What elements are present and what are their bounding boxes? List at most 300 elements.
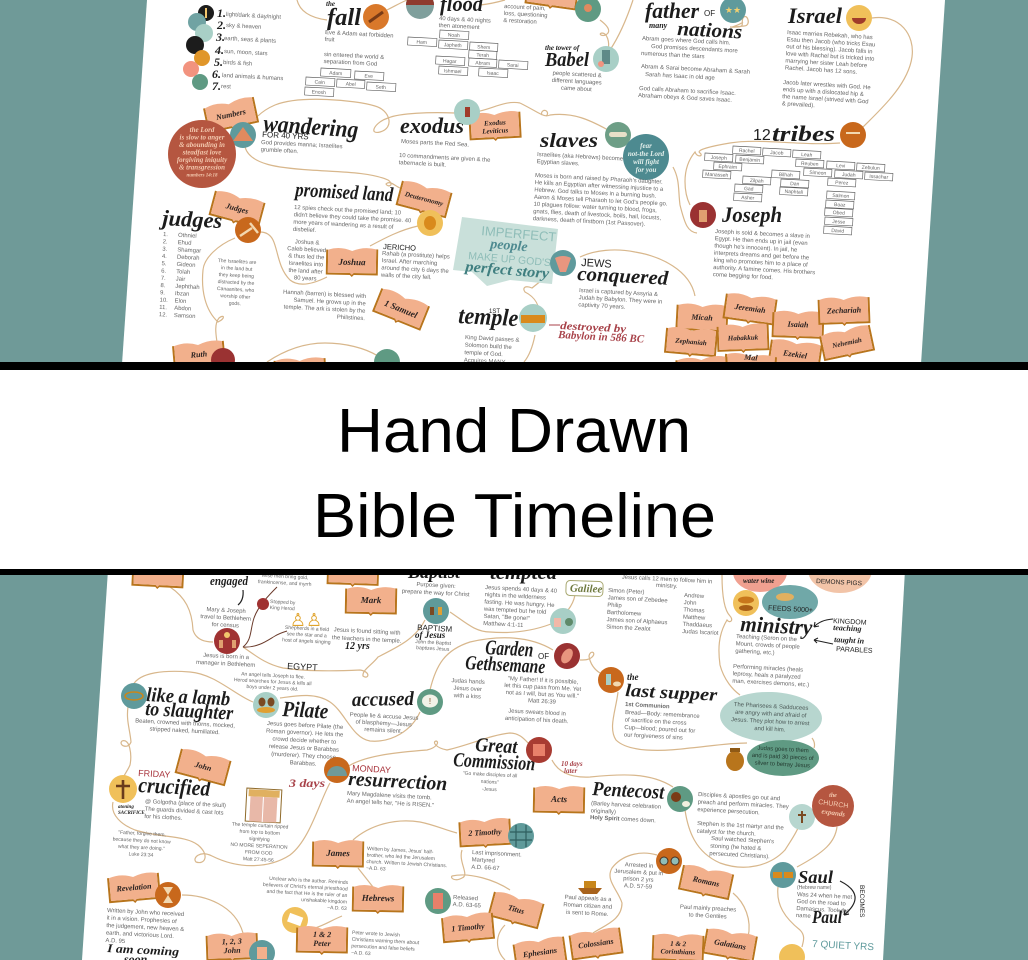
joshua and jericho [286,239,450,283]
the fall: sin entered the world & [324,52,384,61]
garden of gethsemane: not as I will, but as You will." [505,690,579,700]
judges: 5. [161,261,167,267]
slaves: slaves [539,130,598,152]
panel: old testament poster sheet [122,0,945,388]
exodus: Moses parts the Red Sea. [401,139,470,149]
father of many nations: ★★ [725,5,741,15]
james: James [325,848,350,858]
2 timothy: 2 Timothy [467,827,502,838]
prophet books: Ezekiel [782,348,808,361]
great commission: Great [475,734,519,758]
scripture circle: slow to anger: & abounding in [179,141,225,149]
prophet books: Zephaniah [674,337,707,347]
destroyed note and arrow [549,320,645,346]
hebrews: ~A.D. 63 [327,905,347,912]
12 tribes: Ephraim [718,164,737,171]
joshua and jericho: the land after [288,268,323,276]
israel [782,3,877,113]
ministry: ministry [740,611,813,640]
joseph: Joseph [721,202,782,227]
tempted [482,562,576,634]
nativity: engaged and birth: Shepherds in a field [285,625,329,633]
crucified: atoning [118,805,134,810]
pentecost: Saul watched Stephen's [711,836,774,845]
saul becomes paul: God on the road to [797,899,847,908]
1 and 2 peter: Peter wrote to Jewish [352,930,400,938]
like a lamb to slaughter: to slaughter [145,698,234,725]
12 tribes: Joseph [711,155,727,162]
joseph: come begging for food. [713,272,773,281]
tower of babel: the tower of [545,44,580,52]
12 tribes: Leah [801,152,813,159]
israel: Israel [787,3,843,28]
like a lamb to slaughter [121,683,235,737]
pentecost: Holy Spirit comes down. [590,815,656,824]
promised land: promised land [293,179,395,206]
first temple: Acquires MANY [464,358,506,366]
revelation: it in a vision. Prophesies of [107,915,177,925]
12 tribes: 12 [753,127,771,144]
the flood: Japheth [444,42,462,49]
tempted: fasting. He was hungry. He [484,599,555,609]
the flood: Abram [475,60,490,67]
joseph: interprets dreams and get before the [714,251,810,262]
nativity: engaged and birth: manager in Bethlehem [196,660,256,669]
slaves: Moses is born and raised by Pharaoh's daughter. [535,173,663,186]
romans and arrest: prison 2 yrs [623,876,654,884]
temple curtain: signifying [249,836,270,843]
pentecost: experience persecution. [697,807,760,816]
crucified: @ Golgotha (place of the skull) [145,799,226,809]
hebrews: Unclear who is the author. Reminds [269,876,348,886]
nativity: engaged and birth: host of angels singing [282,637,331,646]
paul's letters books: Colossians [578,937,614,950]
great commission: "Go make disciples of all [463,771,517,779]
12 tribes: Rachel [739,148,755,155]
garden of gethsemane: "My Father! If it is possible, [508,676,578,686]
judges: 1. [163,232,168,238]
joshua and jericho: Rahab (a prostitute) helps [382,251,450,261]
days of creation list: light/dark & day/night [226,12,282,21]
temple curtain: from top to bottom [239,829,280,837]
12 tribes: Simeon [809,170,827,177]
12 tribes: Obed [832,210,845,217]
garden of gethsemane [450,635,582,725]
scripture circle: slow to anger: numbers 14:18 [187,174,218,178]
revelation: Written by John who received [107,908,184,918]
joshua and jericho: Caleb believed [287,246,326,254]
crucified: crucified [138,772,212,801]
judges: in the land but [221,265,253,273]
pentecost: stoning (he hated & [710,844,761,852]
the flood: Ham [416,39,427,46]
israel: love with Rachel but is tricked into [786,51,875,63]
12 tribes: Dan [790,181,800,188]
12 tribes: Boaz [834,202,846,209]
resurrection: An angel tells her, "He is RISEN." [347,798,434,809]
crucified: because they do not know [113,836,171,846]
tempted: Matthew 4:1-11 [483,621,523,629]
days of creation list: 2. [216,18,226,32]
galilee and the twelve: Thaddaeus [682,622,712,629]
1 samuel: Hannah (barren) is blessed with [283,290,366,300]
galilee and the twelve: Simon the Zealot [606,624,651,633]
2 timothy: A.D. 66-67 [471,865,500,872]
promised land: more years of wandering as a result of [293,220,394,231]
father of many nations [638,0,750,104]
12 tribes: Perez [835,180,849,187]
garden of gethsemane: Jesus over [453,686,482,693]
john the baptist and baptism: baptizes Jesus [416,645,450,653]
2 timothy: Martyred [472,857,495,865]
joshua and jericho: around the city 6 days the [381,265,450,275]
destroyed note and arrow: Babylon in 586 BC [557,329,645,346]
the flood: Noah [448,32,460,39]
jews conquered: JEWS [581,257,612,271]
judges: The Israelites are [218,258,257,266]
paul's letters books: Released [453,895,478,902]
joshua and jericho: Israel. After marching [382,258,437,267]
garden of gethsemane: anticipation of his death. [505,716,569,725]
saul becomes paul: 7 QUIET YRS [812,939,875,953]
judges: Jair [176,277,185,283]
father of many nations: numerous than the stars [641,51,705,60]
romans and arrest: Jerusalem & put in [614,869,663,877]
job: loss, questioning [504,11,548,19]
days of creation list: 1. [217,6,226,20]
1 and 2 peter [282,907,420,960]
first temple: 1ST [489,309,500,315]
temple curtain: Matt 27:45-56 [243,856,274,864]
exodus: 10 commandments are given & the [399,153,490,164]
promised land: Deuteronomy [403,190,445,208]
the fall: Adam [329,70,342,77]
2 timothy [458,818,534,873]
tower of babel: came about [561,86,592,93]
first temple: King David passes & [465,335,519,344]
prophet books: Nehemiah [831,336,863,350]
john the baptist and baptism: of Jesus [415,630,446,640]
father of many nations: God promises descendants more [651,44,739,55]
scripture circle: slow to anger: is slow to anger [180,134,225,142]
crucified: for his clothes. [144,814,183,822]
exodus: tabernacle is built. [399,160,447,169]
the flood: Hagar [443,58,457,65]
judges: Abdon [174,306,191,313]
nativity: engaged and birth: Mary & Joseph [206,607,246,615]
paul's letters books: A.D. 63-65 [453,902,482,909]
judas ellipse and money bag: and is paid 30 pieces of [752,753,814,762]
temple curtain: The temple curtain ripped [232,822,289,830]
romans and arrest: to the Gentiles [689,913,727,920]
last supper: of sacrifice on the cross [625,717,687,727]
paul's letters books: Titus [507,903,525,916]
pilate: Pilate [281,696,329,723]
judges: 7. [161,276,166,282]
tempted: Satan, "Be gone!" [483,614,530,622]
last supper: Bread—Body: remembrance [625,710,700,720]
new testament connecting path [113,575,837,960]
nativity: engaged and birth: Stopped by [270,599,295,606]
nativity: engaged and birth: Jesus is born in a [203,653,249,661]
judges: 8. [160,283,166,289]
slaves: gnats, flies, death of livestock, boils, hail, locusts, [533,209,662,222]
pharisees ellipse: and kill him. [754,726,786,734]
joseph: though he's innocent). In jail, he [714,243,798,254]
the fall: Seth [375,84,386,91]
galilee and the twelve: Galilee [570,583,603,596]
wandering: grumble often. [261,147,299,155]
12 tribes: Gad [744,186,754,193]
galilee and the twelve: John [684,600,697,607]
12 tribes: Naphtali [784,189,803,196]
promised land: didn't believe they could take the promise. 40 [294,212,412,224]
slaves: He kills an Egyptian after witnessing injustice to a [535,180,664,193]
days of creation list: birds & fish [223,60,252,68]
judges [159,189,266,320]
slaves [533,122,669,229]
paul's letters books: 1 Timothy [451,922,485,933]
mark and jesus at twelve: Jesus is found sitting with [334,627,401,637]
jews conquered: conquered [577,263,670,290]
middle title banner: Hand Drawn [337,397,691,466]
crucified: what they are doing." [118,844,165,852]
galilee and the twelve [566,575,721,637]
israel: Jacob later wrestles with God. He [783,80,871,91]
israel: & prevailed). [782,101,815,109]
pentecost: Pentecost [591,778,666,804]
romans and arrest: Paul appeals as a [565,895,612,903]
garden of gethsemane: let this cup pass from Me. Yet [504,683,582,693]
middle title banner: Bible Timeline [313,482,716,551]
temple curtain [230,788,289,864]
12 tribes: Bilhah [779,172,793,179]
nativity: engaged and birth: EGYPT [287,661,318,673]
judges: Deborah [177,255,200,262]
days of creation list: sun, moon, stars [224,49,268,57]
pentecost: (Barley harvest celebration [591,801,661,811]
saul becomes paul: Damascus. Took the [796,906,850,915]
scripture circle: slow to anger: & transgression [179,164,225,172]
accused [349,688,443,736]
callout: imperfect people: MAKE UP GOD'S [468,250,551,269]
nativity: engaged and birth: An angel tells Joseph to flee. [241,671,305,681]
judges: Samson [174,313,196,320]
judges: they keep being [219,272,254,280]
promised land: disbelief. [293,227,317,234]
joshua and jericho: & thus led the [288,253,325,261]
saul becomes paul: Saul [798,867,833,887]
nativity: engaged and birth: ♙♙ [290,610,322,631]
judges: Gideon [176,262,196,269]
the fall: the [326,0,335,8]
galilee and the twelve: Thomas [683,607,705,614]
days of creation list: sky & heaven [226,23,262,31]
accused: ! [429,697,431,706]
joseph: king who promotes him to a place of [713,258,808,269]
days of creation list: rest [221,84,231,91]
garden of gethsemane: Matt 26:39 [528,698,556,706]
1 2 3 john: 1, 2, 3 [222,937,242,946]
12 tribes [703,121,893,235]
the fall [305,0,396,97]
romans and arrest [563,848,736,921]
joshua and jericho: Joshua & [295,239,319,247]
jews conquered: Israel is captured by Assyria & [579,288,658,298]
accused: of blasphemy—Jesus [355,720,412,728]
slaves: darkness, death of firstborn (1st Passover). [533,216,646,228]
wandering [203,96,359,157]
pilate: (murderer). They choose [271,752,337,761]
three days note: 3 days [288,776,325,790]
first temple [458,303,547,367]
the church expands: expands [821,807,846,819]
like a lamb to slaughter: Beaten, crowned with thorns, mocked, [135,718,235,730]
job: account of pain, [504,4,546,12]
callout: imperfect people [453,217,558,286]
tower of babel: Babel [544,49,589,71]
crucified: "Father, forgive them, [118,830,166,838]
1 and 2 peter: ~A.D. 63 [351,950,371,957]
1 and 2 peter: Christians warning them about [352,937,420,946]
panel: new testament poster sheet [82,547,905,960]
slaves: Israelites (aka Hebrews) become [537,152,623,163]
revelation: earth, and victorious Lord. [106,930,174,940]
12 tribes: David [831,228,844,235]
israel: Esau then Jacob (who tricks Esau [786,37,875,49]
12 tribes: Reuben [801,161,819,168]
galilee and the twelve: Jesus calls 12 men to follow him in [622,575,712,585]
resurrection [324,757,448,809]
accused: People lie & accuse Jesus [350,712,419,722]
callout: imperfect people: people [489,237,528,255]
ministry: KINGDOM [833,618,867,627]
galilee and the twelve: James son of Alphaeus [606,617,668,626]
judges: 9. [160,290,165,297]
the fall: separation from God [323,59,377,68]
slaves: Aaron & Moses tell Pharaoh to let God's people go. [534,195,668,208]
ministry [732,611,873,689]
days of creation list: earth, seas & plants [224,36,276,45]
12 tribes: Jacob [770,150,784,157]
wandering: wandering [263,111,359,144]
12 tribes: tribes [772,121,835,146]
john the baptist and baptism [402,562,470,653]
the flood [406,0,528,78]
ministry: teaching [833,623,862,633]
judges: Ehud [177,240,192,247]
israel: out of his blessing). Jacob falls in [786,44,873,55]
jews conquered: Judah by Babylon. They were in [579,295,662,306]
judges: Ibzan [175,291,190,298]
2 timothy: Last imprisonment. [472,850,522,859]
slaves: not-the Lord [628,150,665,158]
saul becomes paul: Paul [811,907,842,927]
ministry: gathering, etc.) [735,649,775,657]
tempted: tempted [490,562,558,584]
days of creation list [183,5,283,93]
the fall: Eve & Adam eat forbidden [325,30,394,40]
days of creation list: 5. [214,55,223,69]
ruth: Ruth [189,349,208,360]
israel: the name Israel (strived with God [782,94,869,105]
james [312,839,448,876]
the flood: Shem [477,44,490,51]
revelation [105,872,185,960]
slaves: fear [640,142,652,150]
last supper: last supper [625,680,719,705]
mark and jesus at twelve: 12 yrs [345,641,370,652]
judges: 6. [161,268,167,275]
miracles: water, demons, feeds 5000: FEEDS 5000+ [768,605,813,614]
crucified [109,747,232,860]
1 samuel: Samuel. He grows up in the [293,298,367,307]
hebrews: and the fact that He is the ruler of an [266,889,348,899]
ruth [172,340,400,388]
destroyed note and arrow: destroyed by [560,320,627,335]
saul becomes paul [770,862,875,960]
revelation: the judgement, new heaven & [106,923,184,933]
12 tribes: Zebulun [862,165,880,172]
israel: Isaac marries Rebekah, who has [787,30,873,41]
prophet books: Jeremiah [733,302,767,315]
old testament connecting path [203,0,912,362]
the fall: Eve [364,74,373,80]
miracles: water, demons, feeds 5000: DEMONS PIGS [816,578,863,587]
days of creation list: land animals & humans [222,73,283,82]
prophet books: Habakkuk [727,333,759,343]
crucified: The guards divided & cast lots [145,806,224,817]
father of many nations: God calls Abraham to sacrifice Isaac. [639,86,736,97]
judges: 4. [162,254,167,260]
joseph: Egypt. He then ends up in jail (even [715,236,808,247]
hebrews: believers of Christ's eternal priesthood [263,882,348,892]
father of many nations: OF [704,9,715,18]
ministry: man, exercises demons, etc.) [732,679,809,689]
crucified: Luke 23:34 [128,851,154,859]
revelation: Revelation [115,881,152,894]
scripture circle: slow to anger: the Lord [190,126,214,134]
job: & restoration [503,18,537,26]
the flood: Sarai [507,62,519,69]
pilate [253,692,345,769]
judas ellipse and money bag [726,740,819,776]
scripture circle: slow to anger: forgiving iniquity [177,156,228,164]
12 tribes: Zilpah [750,178,764,185]
nativity: engaged and birth: boys under 2 years old. [246,684,299,693]
mark and jesus at twelve: the teachers in the temple. [332,635,402,645]
the fall: fruit [325,37,335,44]
romans and arrest: A.D. 57-59 [624,883,652,891]
1 samuel: temple. The ark is stolen by the [283,305,366,315]
wandering: God provides manna; Israelites [261,140,343,150]
last supper: Cup—blood; poured out for [624,725,695,735]
judges: Elon [174,298,187,305]
great commission: -Jesus [482,786,497,793]
pilate: Barabbas. [289,760,317,768]
pharisees ellipse: Jesus. They plot how to arrest [731,717,810,727]
galilee and the twelve: ministry. [656,583,678,590]
judges: gods. [229,301,241,307]
the flood: Terah [476,52,489,59]
like a lamb to slaughter: like a lamb [146,684,231,710]
nativity: engaged and birth: Herod searches for Jesus & kills all [234,677,312,687]
slaves: for you [636,166,657,174]
slaves: Hebrew. God talks to Moses in a burning bush. [534,187,657,200]
romans and arrest: Roman citizen and [563,902,612,911]
joshua and jericho: 80 years [294,275,317,283]
days of creation list: 4. [214,43,224,57]
